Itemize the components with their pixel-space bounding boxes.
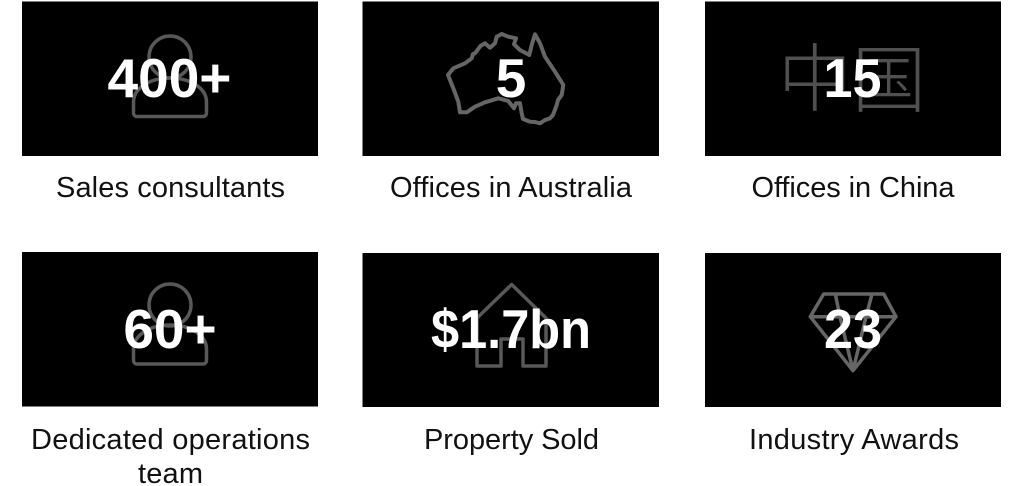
stat number: $1.7bn: $1.7bn [431, 298, 591, 360]
stat number: 15: 15 [824, 47, 882, 109]
panel: dedicated operations team [22, 252, 318, 486]
label: sales consultants: Sales consultants [56, 172, 285, 204]
panel: property sold [362, 253, 659, 456]
panel: industry awards [705, 253, 1001, 456]
icon: person [134, 36, 206, 116]
stat number: 60+: 60+ [123, 298, 217, 360]
label: property sold: Property Sold [424, 424, 599, 456]
stat number: 5: 5 [496, 47, 526, 109]
label: industry awards: Industry Awards [749, 424, 959, 456]
stat number: 23: 23 [824, 298, 882, 360]
panel: sales consultants [22, 2, 318, 204]
icon: diamond [810, 294, 896, 371]
panel: offices in China [705, 2, 1001, 204]
stat number: 400+: 400+ [108, 47, 231, 109]
label: dedicated operations team [31, 424, 310, 486]
icon: Chinese characters for China [778, 20, 926, 128]
icon: house [477, 284, 546, 366]
icon: Chinese characters for China: 中 [778, 20, 852, 127]
icon: map of Australia [448, 34, 563, 123]
label: offices in Australia: Offices in Australia [390, 172, 633, 204]
icon: person [134, 284, 206, 364]
label: dedicated operations team: Dedicated operations [31, 424, 310, 456]
icon: Chinese characters for China: 国 [852, 21, 926, 128]
panel: offices in Australia [362, 2, 659, 204]
label: offices in China: Offices in China [752, 172, 955, 204]
